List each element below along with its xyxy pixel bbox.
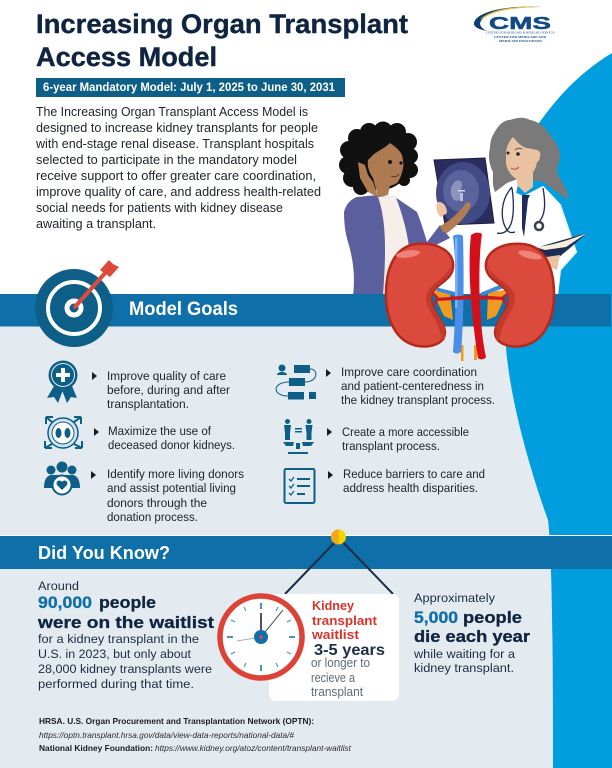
stat: 90,000 on waitlist: U.S. in 2023, but only about — [38, 647, 192, 661]
icon: award ribbon — [47, 360, 78, 403]
stat: 90,000 on waitlist: performed during that time. — [38, 677, 194, 691]
title: Access Model — [36, 42, 217, 72]
illustration: kidneys — [386, 233, 554, 361]
goal: reduce barriers — [284, 467, 485, 503]
references: https://optn.transplant.hrsa.gov/data/view-data-reports/national-data/# — [39, 730, 294, 740]
waitlist card: or longer to — [311, 656, 370, 670]
stat: 5,000 die each year: die each year — [414, 627, 530, 646]
illustration: patient — [339, 122, 450, 296]
stat: 5,000 die each year — [413, 591, 530, 675]
section heading: Model Goals — [35, 260, 238, 347]
goal: quality of care — [47, 360, 230, 411]
section heading: Model Goals: Model Goals — [129, 299, 238, 320]
goal: living donors: donation process. — [107, 510, 198, 524]
intro paragraph: improve quality of care, and address health-related — [36, 185, 321, 199]
CMS logo: CENTERS FOR MEDICARE & MEDICAID SERVICES — [486, 30, 555, 34]
CMS logo: CENTER FOR MEDICARE AND — [494, 35, 547, 39]
goal: accessible process — [283, 419, 469, 454]
waitlist card: transplant — [311, 685, 363, 699]
waitlist card: transplant — [312, 613, 378, 628]
waitlist card: waitlist — [311, 627, 360, 642]
goal: care coordination: the kidney transplant process. — [341, 393, 495, 407]
stat: 5,000 die each year: kidney transplant. — [414, 661, 514, 675]
goal: quality of care: transplantation. — [107, 397, 189, 411]
CMS logo: CMS — [489, 13, 551, 33]
intro paragraph: The Increasing Organ Transplant Access Model is — [36, 105, 308, 119]
stat: 90,000 on waitlist: 28,000 kidney transplants were — [38, 662, 212, 676]
goal: living donors: and assist potential living — [107, 481, 236, 495]
hanging sign strings — [285, 538, 393, 594]
goal: living donors: Identify more living donors — [107, 467, 244, 481]
CMS logo — [474, 7, 555, 43]
section heading: Did You Know band — [0, 535, 612, 569]
intro paragraph: receive support to offer greater care coordination, — [36, 169, 316, 183]
stat: 90,000 on waitlist: people — [99, 593, 156, 612]
icon: clock — [218, 594, 304, 680]
goal: care coordination — [276, 364, 495, 407]
lower panel background — [0, 326, 612, 768]
waitlist card: 3-5 years — [314, 642, 385, 659]
references: https://www.kidney.org/atoz/content/transplant-waitlist — [155, 743, 352, 753]
stat: 90,000 on waitlist: Around — [38, 579, 79, 593]
intro paragraph: designed to increase kidney transplants for people — [36, 121, 318, 135]
goal: deceased donor kidneys: deceased donor kidneys. — [108, 438, 235, 452]
references: National Kidney Foundation: — [39, 743, 153, 753]
illustration: doctor — [470, 118, 576, 296]
icon: target with arrow — [35, 260, 119, 347]
title: Increasing Organ Transplant — [36, 9, 408, 39]
goal: living donors — [44, 462, 244, 524]
stat: 5,000 die each year: 5,000 — [414, 608, 458, 627]
stat: 5,000 die each year: Approximately — [414, 591, 496, 605]
intro paragraph — [35, 105, 321, 231]
references: HRSA. U.S. Organ Procurement and Transplantation Network (OPTN): — [39, 716, 314, 726]
intro paragraph: social needs for patients with kidney disease — [36, 201, 283, 215]
Model Goals band — [0, 294, 611, 326]
waitlist card: recieve a — [311, 671, 355, 685]
intro paragraph: selected to participate in the mandatory model — [36, 153, 297, 167]
stat: 90,000 on waitlist: 90,000 — [38, 593, 92, 612]
stat: 90,000 on waitlist: were on the waitlist — [37, 613, 214, 632]
goal: care coordination: Improve care coordination — [341, 365, 477, 379]
intro paragraph: awaiting a transplant. — [36, 217, 156, 231]
goal: living donors: donors through the — [107, 496, 207, 510]
icon: balanced people — [283, 419, 314, 454]
illustration: x-ray film — [434, 158, 494, 233]
stat: 90,000 on waitlist — [37, 579, 214, 691]
blue background swoosh — [506, 53, 612, 768]
CMS logo: MEDICAID INNOVATION — [499, 39, 543, 43]
references — [39, 716, 352, 753]
goal: care coordination: and patient-centeredness in — [341, 379, 484, 393]
icon: people with heart — [44, 462, 80, 494]
icon: process flow — [276, 364, 316, 400]
goal: accessible process: transplant process. — [342, 439, 440, 453]
goal: deceased donor kidneys — [45, 417, 235, 452]
section heading: Did You Know band: Did You Know? — [38, 543, 170, 563]
waitlist card: Kidney — [312, 598, 355, 613]
goal: quality of care: before, during and after — [107, 383, 230, 397]
stat: 5,000 die each year: people — [463, 608, 522, 627]
date banner: 6-year Mandatory Model: July 1, 2025 to June 30, 2031 — [43, 80, 335, 94]
icon: expanding kidneys — [45, 417, 82, 448]
waitlist card — [269, 594, 399, 701]
goal: accessible process: Create a more accessible — [342, 425, 469, 439]
illustration: open book — [535, 233, 587, 270]
goal: deceased donor kidneys: Maximize the use of — [108, 424, 212, 438]
icon: yellow nail — [331, 530, 346, 544]
icon: checklist — [284, 469, 314, 503]
intro paragraph: with end-stage renal disease. Transplant hospitals — [35, 137, 314, 151]
goal: reduce barriers: Reduce barriers to care and — [343, 467, 485, 481]
title — [36, 9, 408, 72]
stat: 5,000 die each year: while waiting for a — [413, 647, 515, 661]
goal: reduce barriers: address health disparities. — [343, 481, 478, 495]
goal: quality of care: Improve quality of care — [107, 369, 226, 383]
stat: 90,000 on waitlist: for a kidney transplant in the — [38, 632, 199, 646]
